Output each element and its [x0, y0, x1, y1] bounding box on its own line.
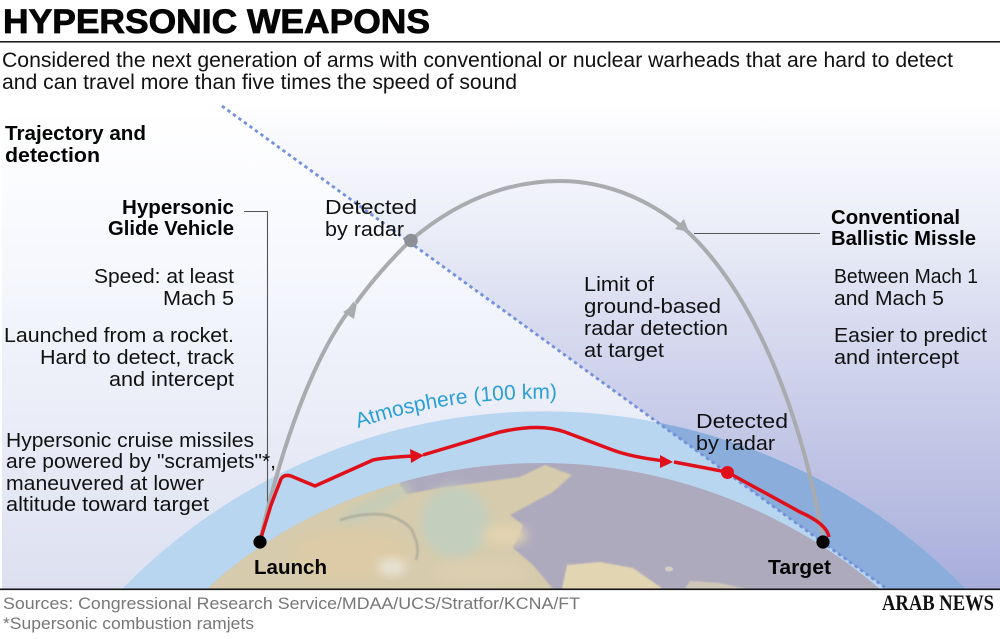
label: detected by radar (hypersonic): by radar: [696, 432, 775, 455]
text: cruise missiles: [6, 429, 276, 516]
heading: trajectory and detection: detection: [5, 144, 100, 167]
text: glide vehicle description: Launched from a rocket.: [4, 324, 234, 347]
text: cruise missiles: altitude toward target: [6, 493, 209, 516]
text: ballistic speed: [834, 265, 978, 310]
label: hypersonic glide vehicle: Glide Vehicle: [108, 217, 234, 240]
label: hypersonic glide vehicle: [108, 196, 234, 240]
text: glide vehicle description: [4, 324, 235, 391]
subtitle: and can travel more than five times the speed of sound: [2, 71, 517, 94]
arrow: red 1: [410, 449, 424, 463]
leader lines: [244, 212, 820, 513]
marker: ballistic detected: [404, 234, 418, 247]
diagram background: radar coverage regions: [2, 100, 1000, 589]
label: target: Target: [768, 556, 831, 579]
marker: red detected: [721, 466, 734, 479]
heading: trajectory and detection: Trajectory and: [5, 122, 146, 145]
sources: *Supersonic combustion ramjets: [3, 614, 254, 633]
label: limit of radar detection: ground-based: [584, 295, 721, 318]
text: glide vehicle description: Hard to detect, track: [40, 346, 235, 369]
atmosphere band: [122, 411, 966, 589]
atmosphere label path: [358, 399, 562, 428]
label: conventional ballistic missile: [831, 206, 976, 250]
sources: Sources: Congressional Research Service/MDAA/UCS/Stratfor/KCNA/FT: [3, 594, 580, 613]
hypersonic glide trajectory: [260, 428, 829, 541]
arrow: upward: [343, 303, 357, 319]
arrow: downward: [675, 219, 689, 232]
text: glide vehicle description: and intercept: [109, 368, 234, 391]
label: detected by radar (ballistic): by radar: [325, 218, 404, 241]
text: ballistic speed: and Mach 5: [834, 287, 944, 310]
text: cruise missiles: are powered by "scramjets"*,: [6, 450, 276, 473]
text: ballistic description: [834, 324, 987, 369]
sources: [3, 594, 580, 633]
label: limit of radar detection: [584, 273, 728, 362]
label: hypersonic glide vehicle: Hypersonic: [122, 196, 234, 219]
label: detected by radar (hypersonic): [696, 410, 788, 455]
text: ballistic speed: Between Mach 1: [834, 265, 978, 288]
ballistic missile trajectory: [260, 181, 822, 541]
text: glide vehicle speed: Speed: at least: [94, 265, 234, 288]
marker: launch: [253, 535, 267, 549]
label: conventional ballistic missile: Ballistic Missle: [831, 227, 976, 250]
text: ballistic description: and intercept: [834, 346, 959, 369]
title: HYPERSONIC WEAPONS: [3, 3, 430, 41]
text: cruise missiles: Hypersonic cruise missiles: [6, 429, 254, 452]
label: detected by radar (hypersonic): Detected: [696, 410, 788, 433]
text: cruise missiles: maneuvered at lower: [6, 472, 204, 495]
label: detected by radar (ballistic): Detected: [325, 196, 417, 219]
limit of radar detection dashed line: [222, 106, 887, 589]
marker: target: [816, 535, 830, 549]
arrow: red 2: [660, 455, 673, 468]
text: glide vehicle speed: Mach 5: [163, 287, 234, 310]
label: detected by radar (ballistic): [325, 196, 417, 241]
label: launch: Launch: [254, 556, 327, 579]
label: conventional ballistic missile: Conventional: [831, 206, 960, 229]
text: glide vehicle speed: [94, 265, 234, 310]
earth: [200, 460, 890, 589]
text: ballistic description: Easier to predict: [834, 324, 987, 347]
subtitle: Considered the next generation of arms with conventional or nuclear warheads that are hard to detect: [2, 49, 953, 72]
heading: trajectory and detection: [5, 122, 146, 167]
label: limit of radar detection: radar detection: [584, 317, 728, 340]
label: limit of radar detection: at target: [584, 339, 664, 362]
subtitle: [2, 49, 953, 94]
atmosphere label: Atmosphere (100 km): [358, 384, 556, 428]
label: limit of radar detection: Limit of: [584, 273, 654, 296]
